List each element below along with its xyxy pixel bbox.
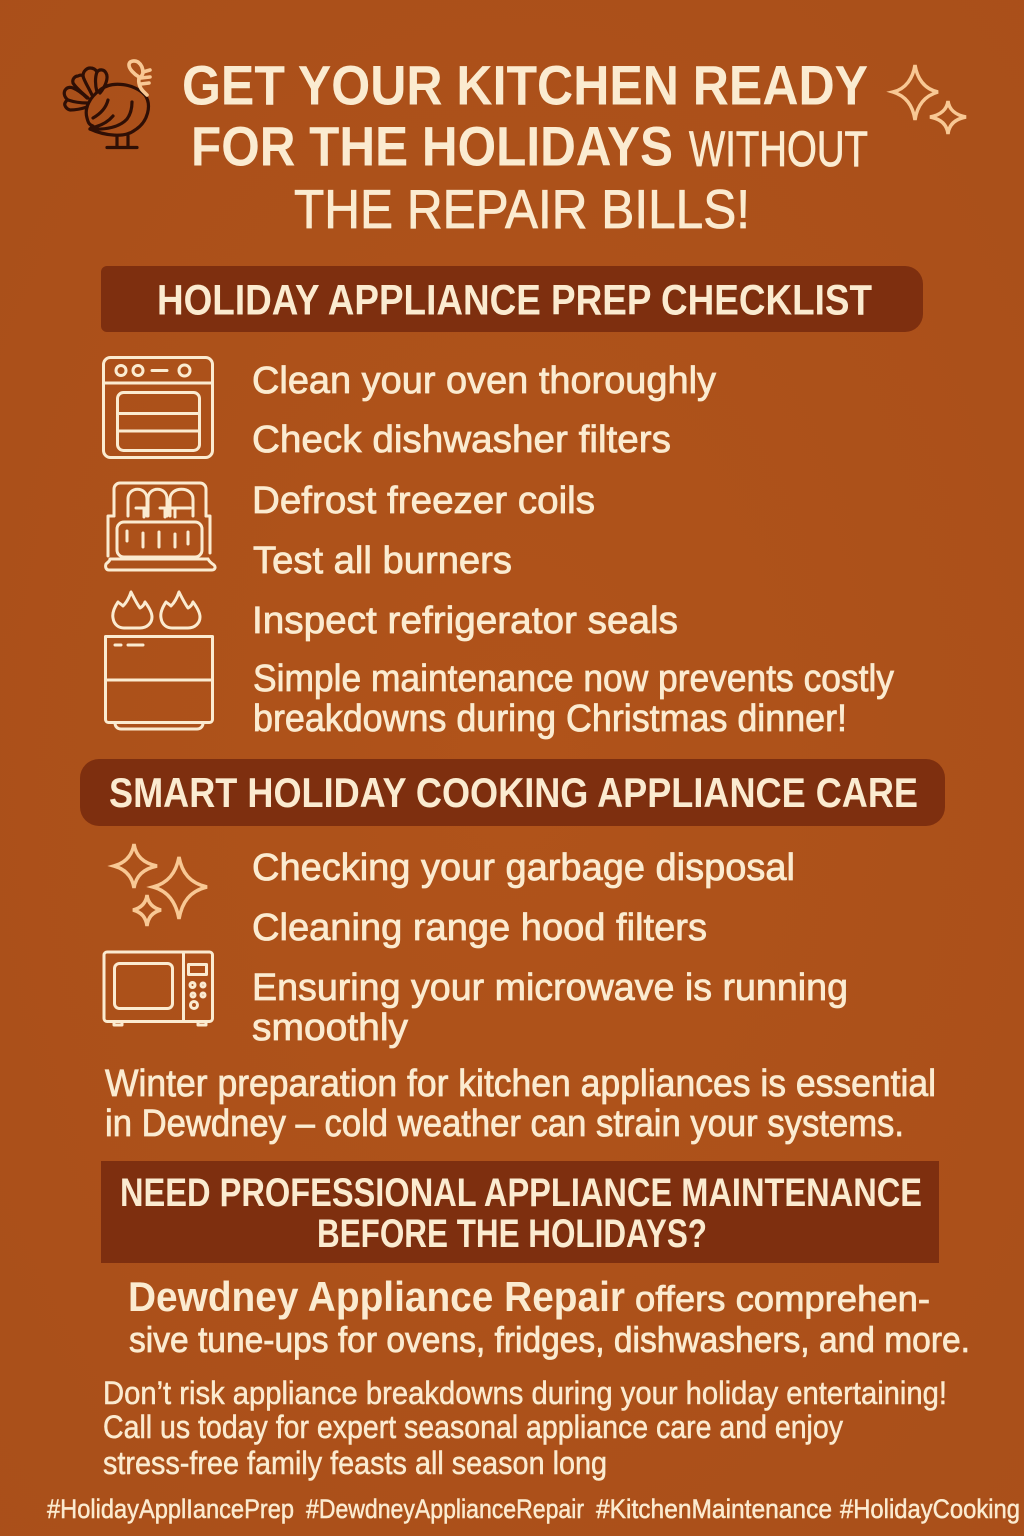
text block: maintenance note: Simple maintenance now prevents costly — [253, 658, 894, 700]
hashtags: #DewdneyApplianceRepair — [306, 1494, 584, 1524]
title: WITHOUT — [689, 121, 868, 177]
icon: oven — [104, 358, 212, 458]
checklist items: Clean your oven thoroughly — [252, 360, 716, 402]
text block: company offer: Dewdney Appliance Repair — [128, 1273, 625, 1320]
care items: Ensuring your microwave is running — [252, 967, 848, 1009]
panel: cooking care heading: SMART HOLIDAY COOKING APPLIANCE CARE — [109, 769, 918, 816]
text block: call to action: stress-free family feasts all season long — [103, 1445, 607, 1481]
text block: company offer — [128, 1273, 970, 1360]
panel: professional maintenance heading: BEFORE THE HOLIDAYS? — [317, 1212, 707, 1256]
title: FOR THE HOLIDAYS — [191, 114, 673, 178]
checklist items: Check dishwasher filters — [252, 419, 671, 461]
panel: checklist heading — [101, 266, 923, 332]
text block: winter preparation: Winter preparation for kitchen appliances is essential — [105, 1063, 936, 1105]
text block: maintenance note: breakdowns during Christmas dinner! — [253, 698, 847, 740]
care items: Checking your garbage disposal — [252, 847, 795, 889]
text block: company offer: offers comprehen- — [635, 1278, 930, 1319]
text block: call to action — [103, 1375, 947, 1481]
checklist items — [252, 360, 716, 642]
text block: call to action: Call us today for expert seasonal appliance care and enjoy — [103, 1409, 843, 1445]
care items — [252, 847, 848, 1049]
hashtags: #HolidayApplIancePrep — [47, 1494, 294, 1524]
title: GET YOUR KITCHEN READY — [182, 54, 868, 116]
title — [182, 54, 868, 240]
text block: company offer: sive tune-ups for ovens, fridges, dishwashers, and more. — [129, 1319, 970, 1360]
text block: maintenance note — [253, 658, 894, 740]
panel: cooking care heading — [80, 759, 945, 826]
title: THE REPAIR BILLS! — [294, 178, 750, 240]
checklist items: Test all burners — [253, 540, 512, 582]
icon: microwave — [104, 952, 212, 1025]
icon: sparkles top right — [893, 65, 966, 134]
text block: winter preparation — [105, 1063, 936, 1145]
hashtags — [47, 1494, 1020, 1524]
hashtags: #KitchenMaintenance — [596, 1494, 832, 1524]
panel: professional maintenance heading — [101, 1161, 939, 1263]
text block: call to action: Don’t risk appliance breakdowns during your holiday entertaining! — [103, 1375, 947, 1411]
icon: stove with flames — [106, 592, 212, 729]
icon: turkey — [64, 61, 150, 148]
panel: checklist heading: HOLIDAY APPLIANCE PREP CHECKLIST — [157, 276, 872, 324]
icon: dishwasher — [106, 483, 215, 570]
icon: sparkles — [114, 844, 207, 926]
checklist items: Defrost freezer coils — [252, 480, 595, 522]
care items: smoothly — [252, 1007, 408, 1049]
care items: Cleaning range hood filters — [252, 907, 707, 949]
checklist items: Inspect refrigerator seals — [252, 600, 678, 642]
text block: winter preparation: in Dewdney – cold weather can strain your systems. — [105, 1103, 904, 1145]
